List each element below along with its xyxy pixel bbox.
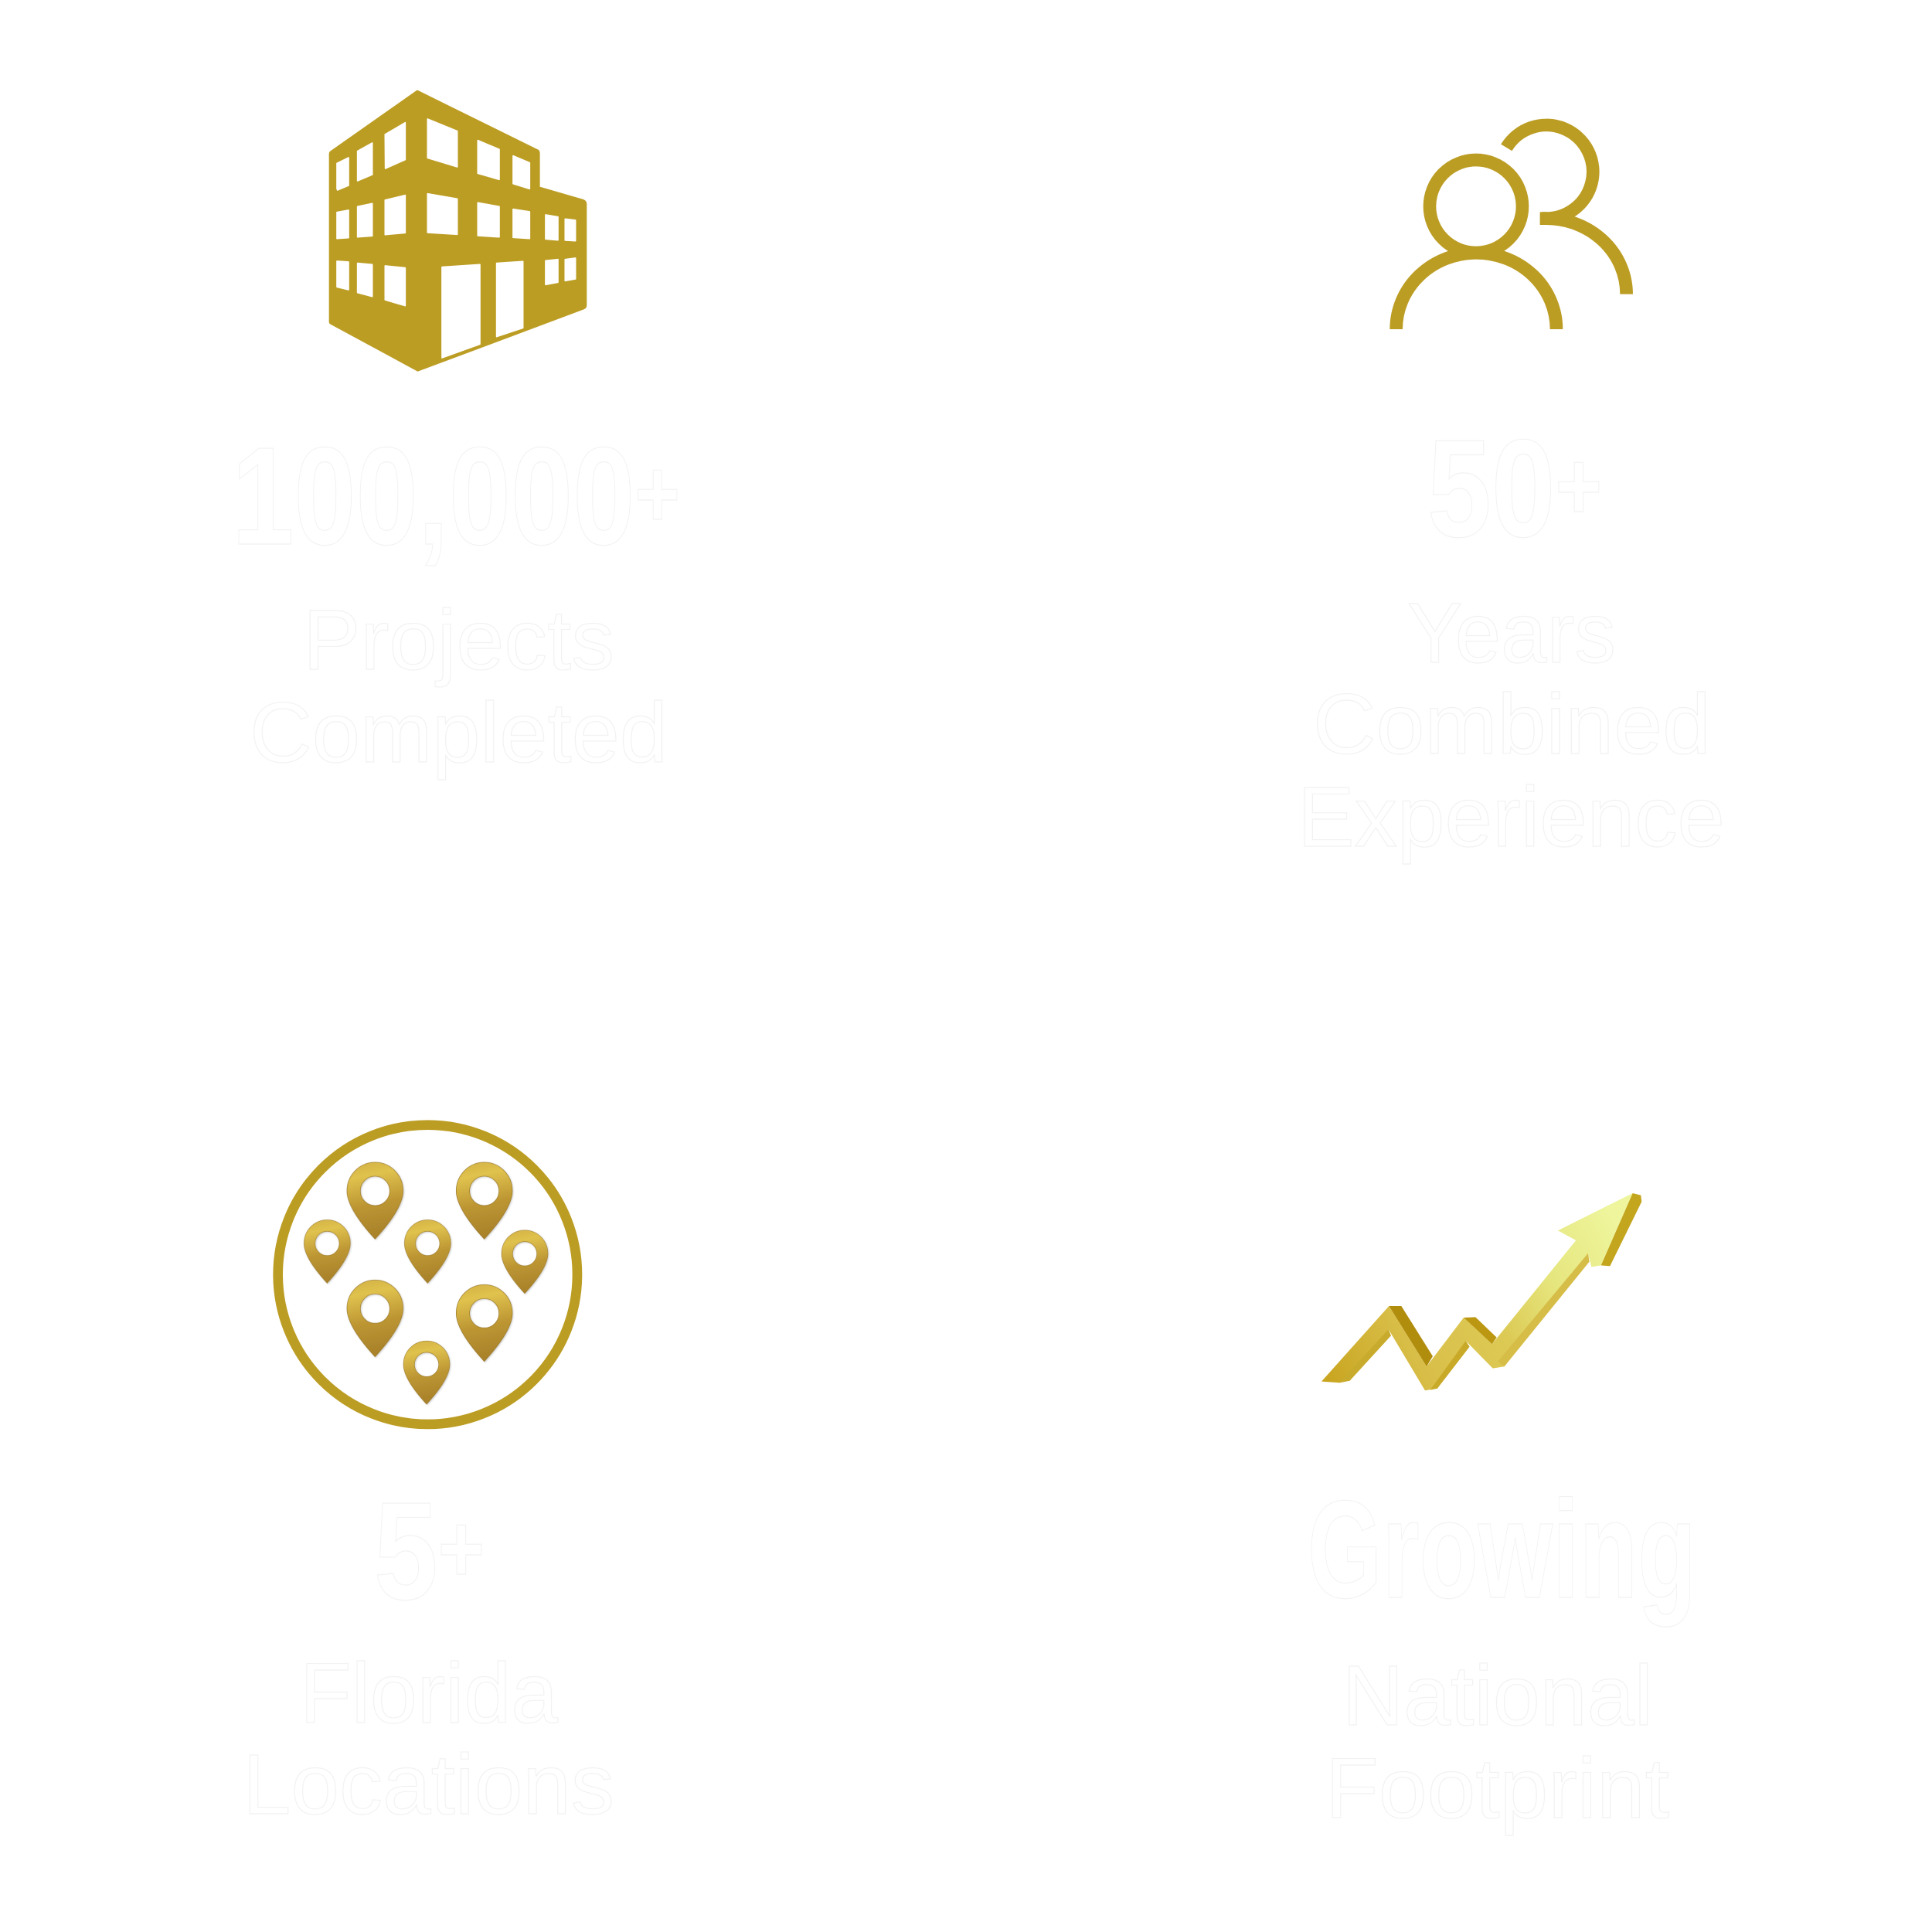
label: Projects Completed: Projects <box>303 593 614 688</box>
label: Years Combined Experience: Years <box>1407 586 1616 681</box>
stat: 100,000+: + <box>634 440 680 548</box>
panel: years combined experience <box>1298 125 1725 865</box>
stat: 5+: 5 <box>374 1474 451 1629</box>
label: Florida Locations: Locations <box>243 1737 614 1832</box>
stat: 50+: + <box>1556 433 1602 540</box>
icon: building <box>330 91 586 370</box>
label: National Footprint <box>1325 1648 1669 1836</box>
panel: projects completed <box>232 91 680 781</box>
label: National Footprint: National <box>1342 1648 1653 1743</box>
label: National Footprint: Footprint <box>1325 1741 1669 1836</box>
icon: location pins in a circle <box>278 1125 577 1424</box>
panel: florida locations <box>243 1125 614 1832</box>
label: Years Combined Experience <box>1298 586 1725 865</box>
label: Years Combined Experience: Experience <box>1298 770 1725 865</box>
panel: growing national footprint <box>1308 1193 1696 1836</box>
stat: 100,000+: 100,000 <box>232 419 735 574</box>
label: Years Combined Experience: Combined <box>1313 677 1711 772</box>
stat: 5+: + <box>438 1495 485 1603</box>
label: Florida Locations: Florida <box>300 1646 559 1741</box>
label: Florida Locations <box>243 1646 614 1832</box>
stat: Growing: Growing <box>1308 1472 1696 1628</box>
label: Projects Completed <box>250 593 668 781</box>
stat: 50+: 50 <box>1427 411 1582 566</box>
icon: two people <box>1396 125 1627 329</box>
icon: rising gold arrow <box>1321 1193 1641 1390</box>
label: Projects Completed: Completed <box>250 685 668 781</box>
